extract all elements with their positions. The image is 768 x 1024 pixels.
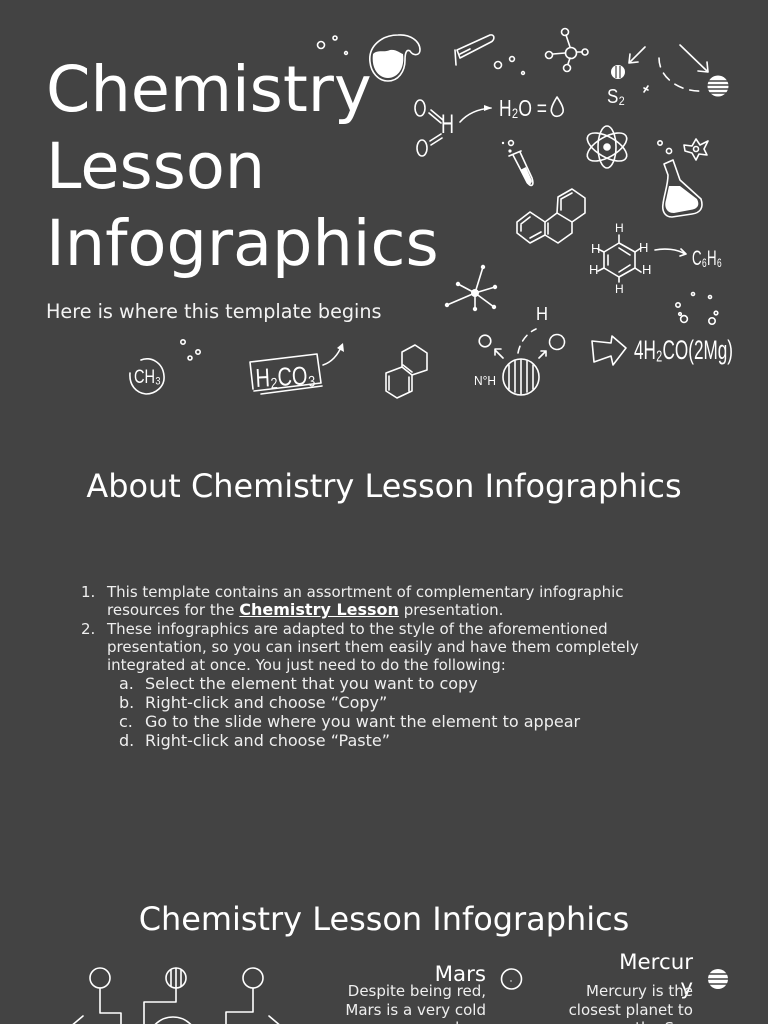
heading: about: About Chemistry Lesson Infographics xyxy=(86,467,682,505)
title: Lesson xyxy=(46,130,265,204)
mercury description xyxy=(569,982,693,1024)
icon: benzene ring xyxy=(589,221,722,296)
icon: star molecule xyxy=(445,265,497,311)
sub-list text: Right-click and choose “Copy” xyxy=(145,693,387,712)
icon: arrow with formula xyxy=(592,335,733,365)
mercury title: Mercur xyxy=(619,950,693,975)
icon: benzene ring: H xyxy=(639,240,648,255)
heading: section 2: Chemistry Lesson Infographics xyxy=(139,900,629,938)
icon: CH3 circle xyxy=(130,359,164,394)
sub-list letters xyxy=(119,674,134,750)
sub-list text: Go to the slide where you want the element to appear xyxy=(145,712,580,731)
icon: molecule cross xyxy=(546,28,588,72)
icon: test tube with bubbles xyxy=(502,141,533,185)
icon: benzene ring: C₆H₆ xyxy=(692,247,722,270)
sub-list letters: c. xyxy=(119,712,133,731)
mars description: Despite being red, xyxy=(348,982,486,1000)
icon: slanted test tube xyxy=(455,35,494,65)
icon: small bubbles xyxy=(181,340,200,360)
icon: atom splitting: N°H xyxy=(474,373,496,388)
mercury description: Mercury is the xyxy=(586,982,693,1000)
mercury title: y xyxy=(680,975,693,1000)
subtitle: Here is where this template begins xyxy=(46,300,382,323)
text: mercury xyxy=(569,950,693,1024)
list text: presentation, so you can insert them easily and have them completely xyxy=(107,638,639,656)
sub-list letters: a. xyxy=(119,674,134,693)
icon: O=H bonds to water: H xyxy=(441,109,454,139)
icon: mercury xyxy=(708,969,728,989)
icon: H2CO3 box: H₂CO₃ xyxy=(255,360,316,393)
mercury description: closest planet to xyxy=(569,1001,693,1019)
icon: atom splitting xyxy=(474,304,564,395)
icon: benzene ring: H xyxy=(589,262,598,277)
icon: reaction arrows and orbit xyxy=(607,45,729,108)
list text: This template contains an assortment of complementary infographic xyxy=(107,583,624,601)
sub-list text: Select the element that you want to copy xyxy=(145,674,478,693)
icon: fused hexagons xyxy=(386,345,427,398)
mars description: Mars is a very cold xyxy=(345,1001,486,1019)
icon: mars xyxy=(502,969,522,989)
mars title: Mars xyxy=(435,962,486,987)
icon: reaction arrows and orbit: S₂ xyxy=(607,86,625,108)
icon: H2CO3 box xyxy=(250,343,344,394)
list text xyxy=(106,583,639,674)
list item 1: 2. xyxy=(81,620,95,638)
icon: atom xyxy=(583,126,631,168)
title: Infographics xyxy=(46,207,439,281)
list text: integrated at once. You just need to do the following: xyxy=(107,656,506,674)
icon: CH3 circle: CH₃ xyxy=(134,367,161,388)
icon: benzene ring: H xyxy=(642,262,651,277)
icon: benzene ring: H xyxy=(615,221,624,235)
title: Chemistry xyxy=(46,53,372,127)
icon: polycyclic molecule xyxy=(517,189,585,243)
icon: scattered bubbles xyxy=(676,292,718,324)
icon: atom splitting: H xyxy=(536,304,548,324)
list item 1 xyxy=(81,583,95,638)
numbered instructions xyxy=(81,583,639,750)
list text: resources for the Chemistry Lesson presentation. xyxy=(107,600,503,619)
icon: star xyxy=(684,139,708,160)
icon: conical flask xyxy=(658,141,702,217)
text: mars xyxy=(345,962,486,1024)
title xyxy=(46,53,439,281)
icon: bubbles xyxy=(494,57,524,74)
mars description xyxy=(345,982,486,1024)
icon: O=H bonds to water: H₂O = xyxy=(499,95,547,121)
sub-list text xyxy=(145,674,580,750)
icon: benzene ring: H xyxy=(591,241,600,256)
icon: top bubbles xyxy=(318,36,347,54)
list item 1: 1. xyxy=(81,583,95,601)
list text: These infographics are adapted to the style of the aforementioned xyxy=(107,620,608,638)
icon: round flask xyxy=(370,35,420,81)
mercury title xyxy=(619,950,693,1000)
icon: benzene ring: H xyxy=(615,282,624,296)
diagram: planet connector xyxy=(70,968,282,1024)
icon: O=H bonds to water xyxy=(415,95,563,156)
sub-list letters: d. xyxy=(119,731,134,750)
sub-list text: Right-click and choose “Paste” xyxy=(145,731,390,750)
sub-list letters: b. xyxy=(119,693,134,712)
